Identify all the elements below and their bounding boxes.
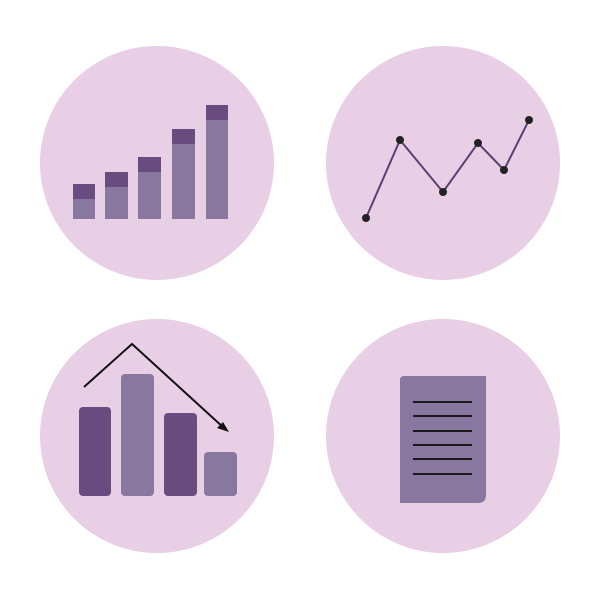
panel: line chart bbox=[326, 46, 560, 280]
bars bbox=[79, 374, 237, 496]
panel: document bbox=[326, 319, 560, 553]
icon: document bbox=[400, 376, 486, 503]
panel: declining bar chart bbox=[40, 319, 274, 553]
bar chart rising bbox=[73, 105, 228, 219]
arrow: downward trend bbox=[84, 344, 229, 432]
panel: bar chart growth bbox=[40, 46, 274, 280]
line chart bbox=[362, 116, 533, 222]
